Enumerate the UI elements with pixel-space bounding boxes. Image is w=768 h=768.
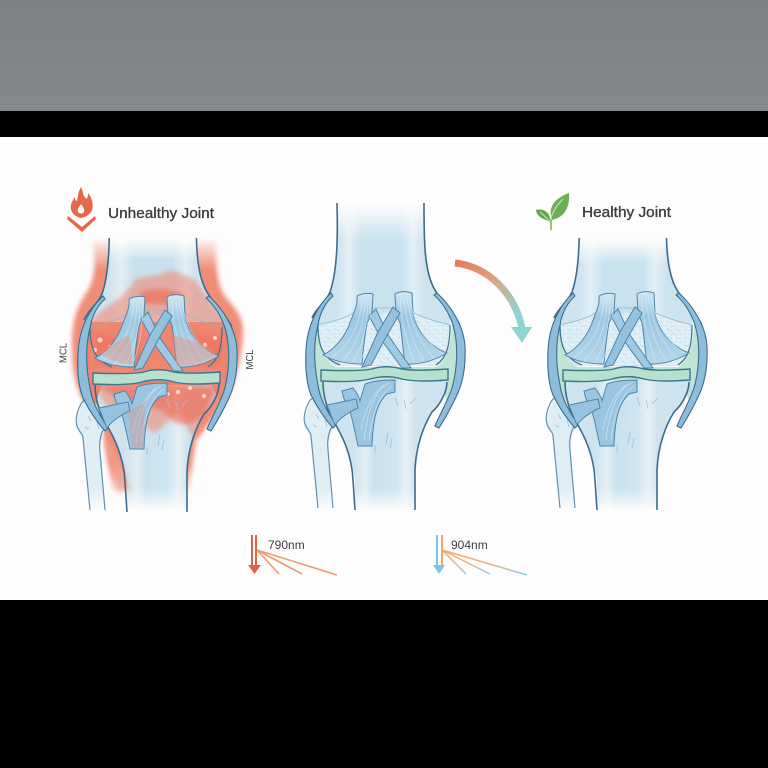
bottom fade bbox=[302, 488, 422, 512]
bones and capsule bbox=[304, 203, 459, 510]
bottom fade bbox=[544, 488, 664, 512]
bone outlines bbox=[76, 205, 232, 512]
top black band bbox=[0, 111, 768, 137]
heading: healthy joint: Healthy Joint bbox=[582, 204, 672, 221]
ligaments and meniscus bbox=[78, 295, 237, 449]
inflammation halo bbox=[72, 236, 243, 500]
heading: unhealthy joint: Unhealthy Joint bbox=[108, 205, 215, 222]
bone outlines bbox=[546, 238, 703, 510]
knee: healthy joint bbox=[546, 238, 708, 510]
label: 904nm: 904nm bbox=[451, 538, 488, 552]
light ray icon: 790nm bbox=[248, 535, 337, 575]
bones and capsule bbox=[76, 242, 222, 508]
ligament redness bbox=[100, 335, 217, 448]
knee: middle joint bbox=[302, 203, 465, 512]
label: MCL left: MCL bbox=[58, 343, 70, 363]
light ray icon: 904nm bbox=[433, 535, 527, 575]
bottom black band bbox=[0, 600, 768, 768]
arrow: curved transition bbox=[455, 263, 532, 343]
ligaments and meniscus bbox=[306, 292, 465, 446]
bone fade top bbox=[108, 238, 198, 260]
bones and capsule bbox=[546, 242, 698, 508]
top fade bbox=[579, 238, 667, 264]
bone outlines bbox=[304, 203, 460, 510]
top fade bbox=[337, 203, 425, 241]
knee: unhealthy joint bbox=[72, 205, 243, 512]
redness overlay bbox=[84, 271, 232, 490]
top grey band bbox=[0, 0, 768, 111]
icon: leaf bbox=[536, 193, 569, 230]
icon: flame bbox=[67, 187, 96, 232]
white panel bbox=[0, 137, 768, 600]
bone fade bottom bbox=[82, 488, 202, 512]
label: MCL right: MCL bbox=[245, 349, 256, 370]
label: 790nm: 790nm bbox=[268, 538, 305, 552]
ligaments and meniscus bbox=[548, 292, 707, 446]
